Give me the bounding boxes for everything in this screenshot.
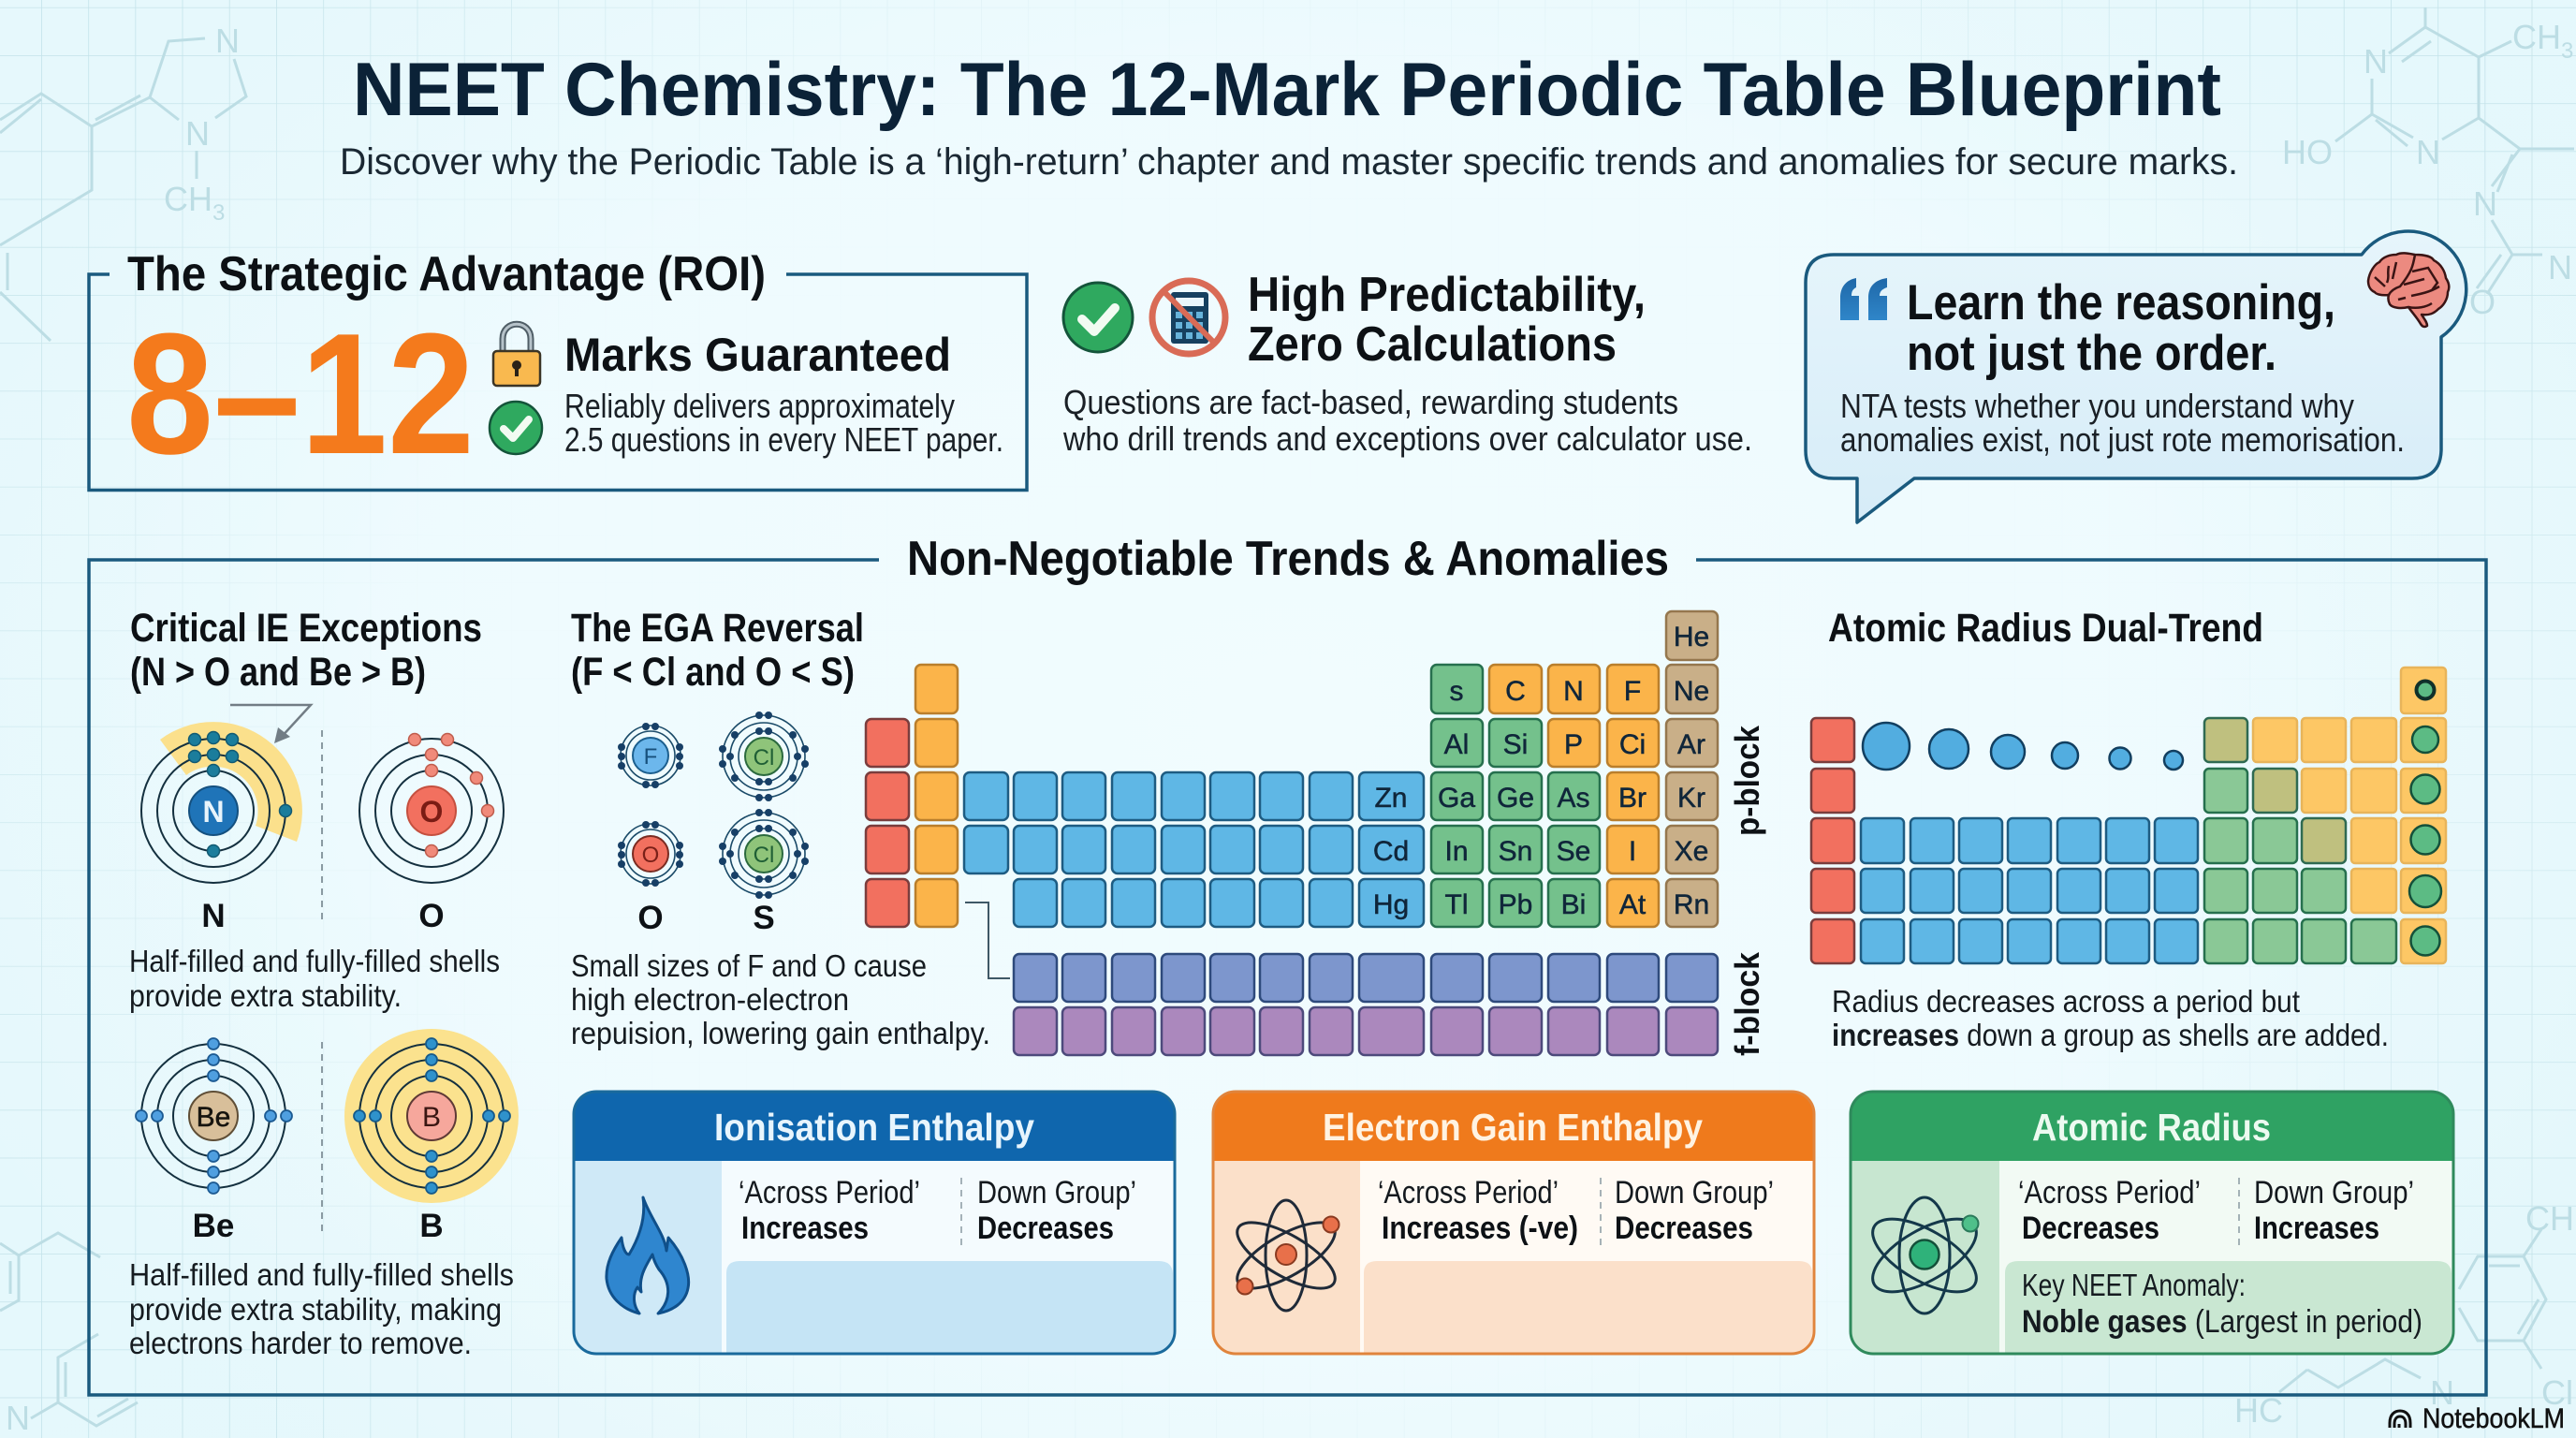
icon: no calculator [1152, 281, 1225, 354]
element symbols: Zn [1374, 783, 1408, 814]
card: atomic radius [1851, 1092, 2453, 1354]
text: radius explanation: Radius decreases across a period but [1832, 984, 2300, 1019]
element symbols: As [1557, 783, 1590, 814]
heading: IE exceptions: Critical IE Exceptions [130, 606, 482, 651]
background molecule: top right: N [2473, 184, 2497, 223]
element symbols: Pb [1499, 889, 1532, 920]
label: p-block: p-block [1728, 725, 1766, 836]
background molecule: top left: CH [164, 180, 212, 218]
heading: EGA reversal [571, 606, 864, 695]
quote heading: Learn the reasoning, [1907, 275, 2335, 330]
quote heading [1907, 275, 2335, 381]
element symbols: C [1505, 676, 1526, 707]
trend: across period: Decreases [2022, 1211, 2159, 1246]
arrow: half-filled shell pointer [230, 705, 311, 743]
predictability text [1062, 383, 1752, 458]
text: Be vs B explanation: provide extra stability, making [129, 1292, 502, 1327]
element symbols: Kr [1677, 783, 1705, 814]
background molecule: bottom left [0, 1233, 138, 1437]
card title: Ionisation Enthalpy [714, 1106, 1034, 1149]
key NEET anomaly: Key NEET Anomaly: [2022, 1268, 2246, 1302]
heading: strategic advantage: The Strategic Advantage (ROI) [127, 247, 766, 301]
element symbols: At [1619, 889, 1647, 920]
element symbols: Tl [1445, 889, 1468, 920]
icon: atom green [1862, 1197, 1987, 1313]
callout: speech bubble [1806, 231, 2466, 522]
key NEET anomaly [2022, 1268, 2422, 1340]
background molecule: bottom right: HC [2234, 1391, 2283, 1430]
element symbols: In [1444, 836, 1469, 867]
sub-panel: critical IE exceptions [129, 606, 519, 1360]
text: Be vs B explanation: electrons harder to remove. [129, 1326, 472, 1360]
element symbols: Xe [1675, 836, 1708, 867]
heading: IE exceptions: (N > O and Be > B) [130, 650, 426, 695]
element symbols: He [1674, 622, 1709, 653]
label: S: S [753, 900, 775, 936]
noble gas circles [2409, 682, 2441, 955]
element symbols: s [1449, 676, 1464, 707]
quote text [1840, 387, 2405, 459]
atom: chlorine [719, 712, 809, 801]
background molecule: top left [0, 22, 246, 341]
element symbols: Si [1503, 729, 1528, 760]
text: Be vs B explanation: Half-filled and fully-filled shells [129, 1257, 514, 1292]
element symbols: P [1564, 729, 1583, 760]
text: radius explanation [1832, 984, 2389, 1052]
icon: green check [490, 402, 542, 454]
text: N vs O explanation: Half-filled and fully-filled shells [129, 944, 500, 978]
background molecule: top right: O [2469, 283, 2496, 321]
trend: across period: ‘Across Period’ [1378, 1175, 1559, 1211]
background molecule: bottom right [2234, 1199, 2574, 1430]
atom: beryllium [136, 1038, 292, 1194]
trend: across period [1378, 1175, 1578, 1246]
trend: down group: Decreases [977, 1211, 1114, 1246]
element symbols: Cd [1373, 836, 1409, 867]
panel frame [89, 560, 2486, 1395]
atom: sulfur drawn labelled Cl: Cl [754, 843, 774, 868]
element symbols: Se [1557, 836, 1590, 867]
sub-panel: EGA reversal [571, 606, 1766, 1056]
label: O: O [418, 898, 445, 934]
panel: non-negotiable trends and anomalies [89, 532, 2486, 1395]
predictability text: who drill trends and exceptions over calculator use. [1062, 419, 1752, 458]
quote text: NTA tests whether you understand why [1840, 387, 2354, 425]
background molecule: top right: N [2364, 42, 2388, 81]
shrinking radius circles [1863, 723, 2183, 770]
big number 8–12: 8–12 [126, 297, 475, 490]
background molecule: bottom right: Cl [2541, 1373, 2573, 1412]
element symbols: I [1629, 836, 1636, 867]
trend: down group [2254, 1175, 2414, 1246]
background molecule: top left: 3 [212, 200, 225, 226]
trend: across period: ‘Across Period’ [2018, 1175, 2201, 1211]
atom: oxygen small: O [642, 843, 659, 868]
atom: boron: B [422, 1102, 441, 1133]
trend: down group: Decreases [1615, 1211, 1753, 1246]
trend: down group: Down Group’ [2254, 1175, 2414, 1211]
predictability text: Questions are fact-based, rewarding students [1063, 383, 1678, 421]
trend: down group [977, 1175, 1136, 1246]
text: EGA explanation [571, 948, 990, 1050]
trend: across period [2018, 1175, 2201, 1246]
marks guaranteed heading: Marks Guaranteed [564, 329, 951, 381]
icon: quote mark [1840, 278, 1887, 320]
label: Be: Be [193, 1208, 234, 1244]
subtitle: Discover why the Periodic Table is a ‘high-return’ chapter and master specific trends and anomalies for secure marks. [340, 141, 2238, 183]
element symbols: Sn [1499, 836, 1532, 867]
trend: across period: Increases (-ve) [1382, 1211, 1578, 1246]
trend: down group: Down Group’ [977, 1175, 1136, 1211]
heading: EGA reversal: The EGA Reversal [571, 606, 864, 651]
atom: beryllium: Be [197, 1102, 230, 1133]
background molecule: top right [2282, 7, 2574, 321]
heading: IE exceptions [130, 606, 482, 695]
quote heading: not just the order. [1907, 326, 2276, 381]
text: N vs O explanation: provide extra stability. [129, 978, 402, 1013]
background molecule: top right: N [2416, 133, 2440, 171]
sub-panel: atomic radius dual-trend [1811, 606, 2446, 1052]
panel: high predictability [1062, 268, 1752, 458]
heading: high predictability [1248, 268, 1646, 372]
text: Be vs B explanation [129, 1257, 514, 1360]
heading: EGA reversal: (F < Cl and O < S) [571, 650, 855, 695]
text: EGA explanation: Small sizes of F and O cause [571, 948, 927, 983]
heading: atomic radius: Atomic Radius Dual-Trend [1828, 606, 2263, 651]
text: N vs O explanation [129, 944, 500, 1013]
atom: sulfur drawn labelled Cl [719, 809, 809, 899]
panel: strategic advantage ROI [89, 247, 1027, 491]
marks guaranteed text: 2.5 questions in every NEET paper. [564, 420, 1003, 459]
icon: check [1063, 283, 1133, 352]
mini periodic table [1811, 668, 2446, 963]
background molecule: top left: N [185, 114, 210, 153]
trend: down group: Increases [2254, 1211, 2379, 1246]
element symbols: Ne [1674, 676, 1709, 707]
element symbols: Ge [1497, 783, 1534, 814]
marks guaranteed text: Reliably delivers approximately [564, 387, 955, 425]
icon: brain [2368, 253, 2449, 327]
atom: nitrogen [141, 722, 302, 883]
card title: Electron Gain Enthalpy [1323, 1106, 1703, 1149]
atom: fluorine: F [644, 744, 657, 770]
text: EGA explanation: high electron-electron [571, 982, 849, 1017]
marks guaranteed text [564, 387, 1003, 459]
background molecule: bottom right: CH [2525, 1199, 2574, 1238]
atom: chlorine: Cl [754, 745, 774, 770]
trend: across period: Increases [741, 1211, 869, 1246]
card: ionisation enthalpy [574, 1092, 1175, 1354]
atom: fluorine [618, 723, 683, 788]
element symbols: Ar [1677, 729, 1705, 760]
trend: across period [739, 1175, 920, 1246]
atom: oxygen: O [420, 795, 443, 829]
trend: across period: ‘Across Period’ [739, 1175, 920, 1211]
background molecule: top left: N [215, 22, 240, 60]
element symbols: Rn [1674, 889, 1709, 920]
background molecule: bottom right: N [2430, 1373, 2454, 1412]
element symbols: Al [1444, 729, 1469, 760]
background molecule: bottom left: N [6, 1399, 30, 1437]
heading: high predictability: Zero Calculations [1248, 317, 1617, 372]
icon: atom orange [1228, 1200, 1344, 1311]
trend: down group: Down Group’ [1615, 1175, 1774, 1211]
panel frame [89, 274, 1027, 491]
section heading: Non-Negotiable Trends & Anomalies [907, 532, 1669, 586]
bubble shape [1806, 231, 2466, 522]
quote text: anomalies exist, not just rote memorisation. [1840, 420, 2405, 459]
element symbols: Ci [1619, 729, 1646, 760]
element symbols [1373, 622, 1709, 920]
card: electron gain enthalpy [1213, 1092, 1814, 1354]
icon: flame [607, 1197, 689, 1313]
periodic table [866, 611, 1718, 1055]
heading: high predictability: High Predictability, [1248, 268, 1646, 322]
text: EGA explanation: repuision, lowering gain enthalpy. [571, 1016, 990, 1050]
background molecule: top right: 3 [2561, 38, 2573, 64]
element symbols: N [1563, 676, 1584, 707]
background molecule: top right: N [2548, 248, 2572, 286]
element symbols: Ga [1438, 783, 1475, 814]
card title: Atomic Radius [2032, 1106, 2271, 1149]
label: f-block: f-block [1728, 951, 1766, 1056]
background molecule: top right: HO [2282, 133, 2333, 171]
label: B: B [419, 1208, 444, 1244]
element symbols: F [1624, 676, 1641, 707]
text: radius explanation: increases down a group as shells are added. [1832, 1018, 2389, 1052]
atom: oxygen [359, 734, 504, 883]
atom: oxygen small [618, 821, 683, 887]
icon: padlock [493, 324, 540, 386]
trend: down group [1615, 1175, 1774, 1246]
title: NEET Chemistry: The 12-Mark Periodic Table Blueprint [353, 48, 2221, 132]
key NEET anomaly: Noble gases (Largest in period) [2022, 1304, 2422, 1340]
element symbols: Bi [1561, 889, 1586, 920]
background molecule: top right: CH [2512, 18, 2561, 56]
element symbols: Hg [1373, 889, 1409, 920]
atom: boron [344, 1029, 519, 1203]
label: O: O [637, 900, 664, 936]
atom: nitrogen: N [202, 795, 225, 829]
label: N: N [201, 898, 226, 934]
element symbols: Br [1618, 783, 1647, 814]
